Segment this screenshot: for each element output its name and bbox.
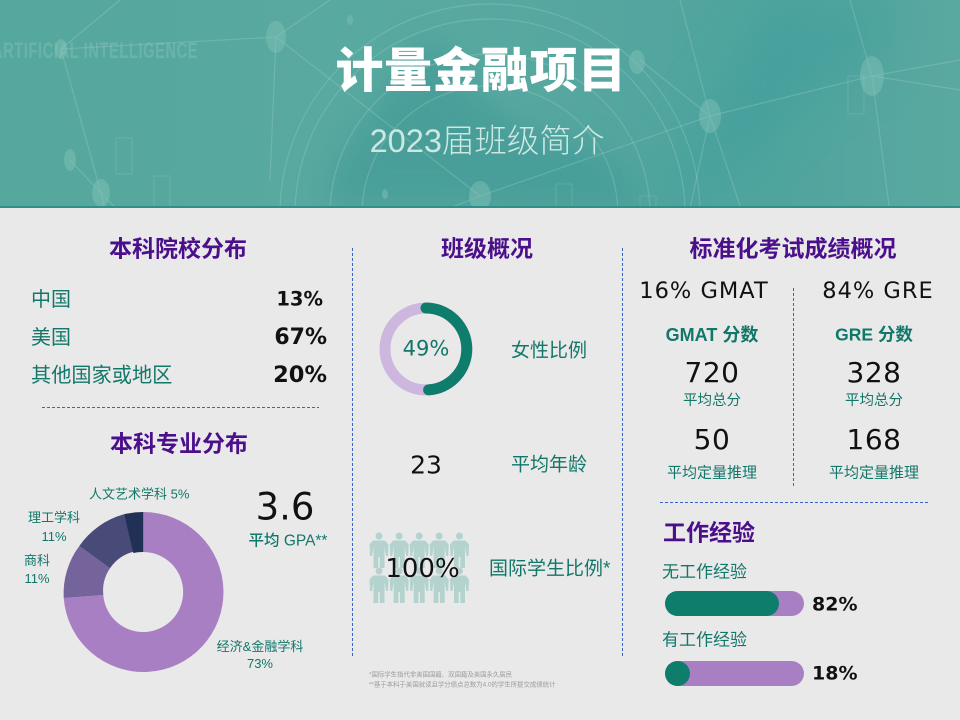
label: average age: 平均年龄 [511, 454, 587, 476]
value: with experience: 18% [812, 662, 857, 684]
value: China: 13% [276, 287, 323, 310]
heading: institutions: 本科院校分布 [109, 236, 247, 262]
row: USA: 美国 [31, 327, 71, 349]
label: with experience: 有工作经验 [662, 630, 747, 650]
label: business: 11% [24, 571, 50, 586]
value: USA: 67% [274, 324, 327, 350]
label: GRE quant: 平均定量推理 [829, 464, 919, 482]
heading: GRE score: GRE 分数 [835, 324, 913, 344]
label: GMAT quant: 平均定量推理 [667, 464, 757, 482]
value: no experience: 82% [812, 594, 857, 616]
value: GRE total: 328 [847, 356, 901, 389]
footnotes: **基于本科于美国就读且学分绩点总数为4.0的学生所提交成绩统计 [369, 681, 555, 688]
stat: GPA label: 平均 GPA** [249, 532, 327, 549]
footnotes [369, 671, 556, 688]
label: science [28, 510, 80, 544]
value: other: 20% [273, 361, 327, 387]
label: arts: 人文艺术学科 5% [89, 486, 189, 502]
footnotes: *国际学生指代非美国国籍、双国籍及美国永久居民 [369, 672, 512, 678]
bar: no experience [665, 591, 804, 616]
label: economics and finance: 经济&金融学科 [217, 639, 303, 654]
label: no experience: 无工作经验 [662, 562, 747, 582]
label: female ratio: 女性比例 [511, 340, 587, 362]
label: science: 理工学科 [28, 510, 80, 525]
bar: with experience [665, 661, 804, 686]
stat: GMAT share: 16% GMAT [639, 278, 769, 304]
icon: people grid [370, 532, 469, 603]
subtitle: 2023届班级简介 [370, 123, 604, 159]
label: business: 商科 [24, 553, 50, 568]
panel: test scores [639, 236, 934, 482]
label: economics and finance: 73% [247, 656, 273, 671]
ring chart: female ratio [380, 302, 472, 396]
value: GRE quant: 168 [847, 423, 901, 456]
stat: GPA value: 3.6 [256, 486, 314, 528]
header banner [0, 0, 960, 208]
panel: undergraduate majors [24, 430, 328, 672]
network background graphic [55, 0, 960, 206]
panel: work experience [662, 520, 857, 686]
heading: test scores: 标准化考试成绩概况 [690, 236, 896, 262]
value: average age: 23 [410, 450, 442, 480]
panel: class overview [369, 236, 610, 688]
heading: GMAT score: GMAT 分数 [666, 325, 758, 345]
label: economics and finance [217, 639, 303, 671]
value: international ratio: 100% [385, 554, 460, 584]
row: China: 中国 [31, 289, 71, 311]
value: GMAT total: 720 [685, 356, 739, 389]
value: GMAT quant: 50 [694, 423, 730, 456]
donut chart [64, 512, 224, 672]
panel: undergraduate institutions [31, 236, 327, 387]
value: female ratio: 49% [403, 336, 449, 360]
main title: 计量金融项目 [335, 45, 627, 98]
heading: majors: 本科专业分布 [110, 430, 248, 456]
label: GMAT total: 平均总分 [683, 393, 741, 409]
row: other: 其他国家或地区 [31, 365, 172, 387]
label: science: 11% [41, 529, 67, 544]
heading: overview: 班级概况 [441, 236, 533, 262]
stat: GRE share: 84% GRE [822, 278, 934, 304]
label: GRE total: 平均总分 [845, 393, 903, 409]
heading: work experience: 工作经验 [663, 520, 755, 546]
label: international ratio: 国际学生比例* [489, 558, 610, 580]
label: business [24, 553, 50, 586]
